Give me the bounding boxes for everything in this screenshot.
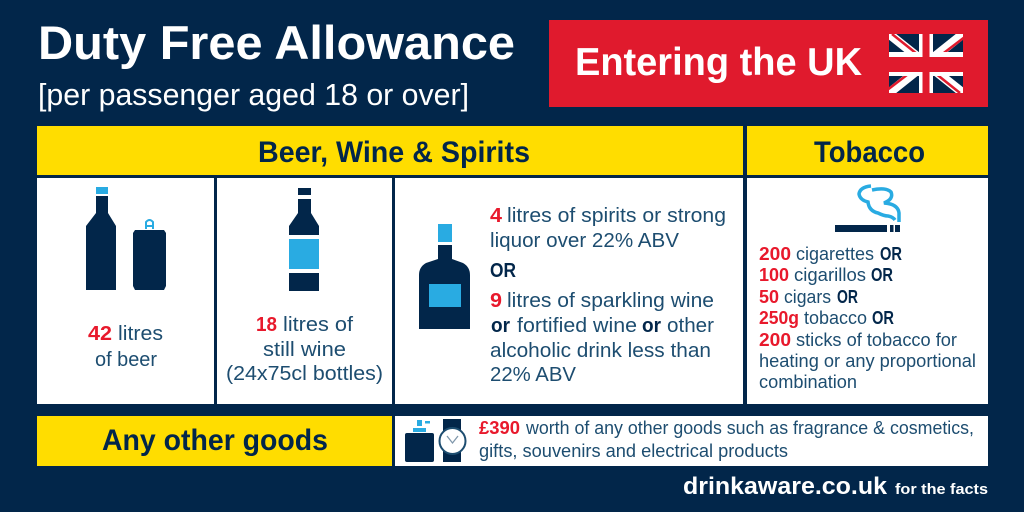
icon: wine bottle: [289, 188, 319, 291]
icon: beer can: [133, 220, 166, 290]
tobacco allowance list: 200: [759, 244, 791, 264]
tobacco allowance list: OR: [871, 265, 893, 285]
icon: union flag: [886, 34, 966, 93]
tobacco allowance list: cigarillos: [794, 265, 866, 285]
wine allowance: still wine: [263, 339, 346, 361]
icon: cigarette with smoke: [835, 186, 900, 232]
tobacco allowance list: combination: [759, 372, 857, 392]
tobacco allowance list: 200: [759, 330, 791, 350]
panel: beer: [37, 178, 214, 404]
panel: spirits and other drinks: [395, 178, 743, 404]
tobacco allowance list: cigars: [784, 287, 831, 307]
tobacco allowance list: 50: [759, 287, 779, 307]
header: beer, wine and spirits: Beer, Wine & Spirits: [258, 136, 530, 169]
wine and other drinks allowance: 9: [490, 290, 502, 312]
tobacco allowance list: 250g: [759, 308, 799, 328]
spirits allowance: litres of spirits or strong: [507, 205, 726, 227]
tobacco allowance list: heating or any proportional: [759, 351, 976, 371]
wine and other drinks allowance: [490, 290, 714, 386]
header: tobacco: Tobacco: [814, 136, 925, 169]
wine allowance: litres of: [283, 314, 353, 336]
wine allowance: (24x75cl bottles): [226, 363, 383, 385]
tobacco allowance list: OR: [880, 244, 902, 264]
wine and other drinks allowance: litres of sparkling wine: [507, 290, 714, 312]
other goods allowance: £390: [479, 418, 520, 438]
icon: beer bottle: [86, 187, 116, 290]
spirits allowance: liquor over 22% ABV: [490, 230, 680, 252]
icon: perfume bottle: [405, 420, 434, 462]
other goods allowance: [479, 418, 974, 461]
wine and other drinks allowance: fortified wine: [517, 315, 637, 337]
or divider text: OR: [490, 260, 516, 282]
panel: tobacco: [747, 178, 988, 404]
wine and other drinks allowance: 22% ABV: [490, 364, 577, 386]
beer allowance: [88, 323, 163, 371]
icon: wristwatch: [440, 419, 466, 462]
tobacco allowance list: tobacco: [804, 308, 867, 328]
spirits allowance: [490, 205, 726, 252]
tobacco allowance list: cigarettes: [796, 244, 874, 264]
beer allowance: 42: [88, 323, 112, 345]
wine allowance: 18: [256, 314, 277, 336]
beer allowance: litres: [118, 323, 163, 345]
other goods allowance: gifts, souvenirs and electrical products: [479, 441, 788, 461]
header: any other goods: Any other goods: [102, 424, 328, 457]
header: beer, wine and spirits: [37, 126, 743, 175]
footer: tagline: for the facts: [895, 481, 988, 498]
tobacco allowance list: OR: [872, 308, 894, 328]
header: tobacco: [747, 126, 988, 175]
panel: wine: [217, 178, 392, 404]
icon: spirits bottle: [419, 224, 470, 329]
wine and other drinks allowance: or: [491, 315, 510, 337]
banner heading: Entering the UK: [575, 41, 862, 84]
wine and other drinks allowance: or: [642, 315, 661, 337]
beer allowance: of beer: [95, 349, 157, 371]
tobacco allowance list: 100: [759, 265, 789, 285]
tobacco allowance list: OR: [837, 287, 858, 307]
subtitle: [per passenger aged 18 or over]: [38, 77, 469, 112]
wine and other drinks allowance: other: [667, 315, 714, 337]
wine and other drinks allowance: alcoholic drink less than: [490, 340, 711, 362]
header: any other goods: [37, 416, 392, 466]
spirits allowance: 4: [490, 205, 503, 227]
footer: website: drinkaware.co.uk: [683, 473, 888, 500]
panel: other goods: [395, 416, 988, 466]
title: Duty Free Allowance: [38, 16, 515, 69]
panel: entering the UK banner: [549, 20, 988, 107]
wine allowance: [226, 314, 383, 385]
other goods allowance: worth of any other goods such as fragrance & cosmetics,: [525, 418, 974, 438]
tobacco allowance list: sticks of tobacco for: [796, 330, 957, 350]
tobacco allowance list: [759, 244, 976, 392]
